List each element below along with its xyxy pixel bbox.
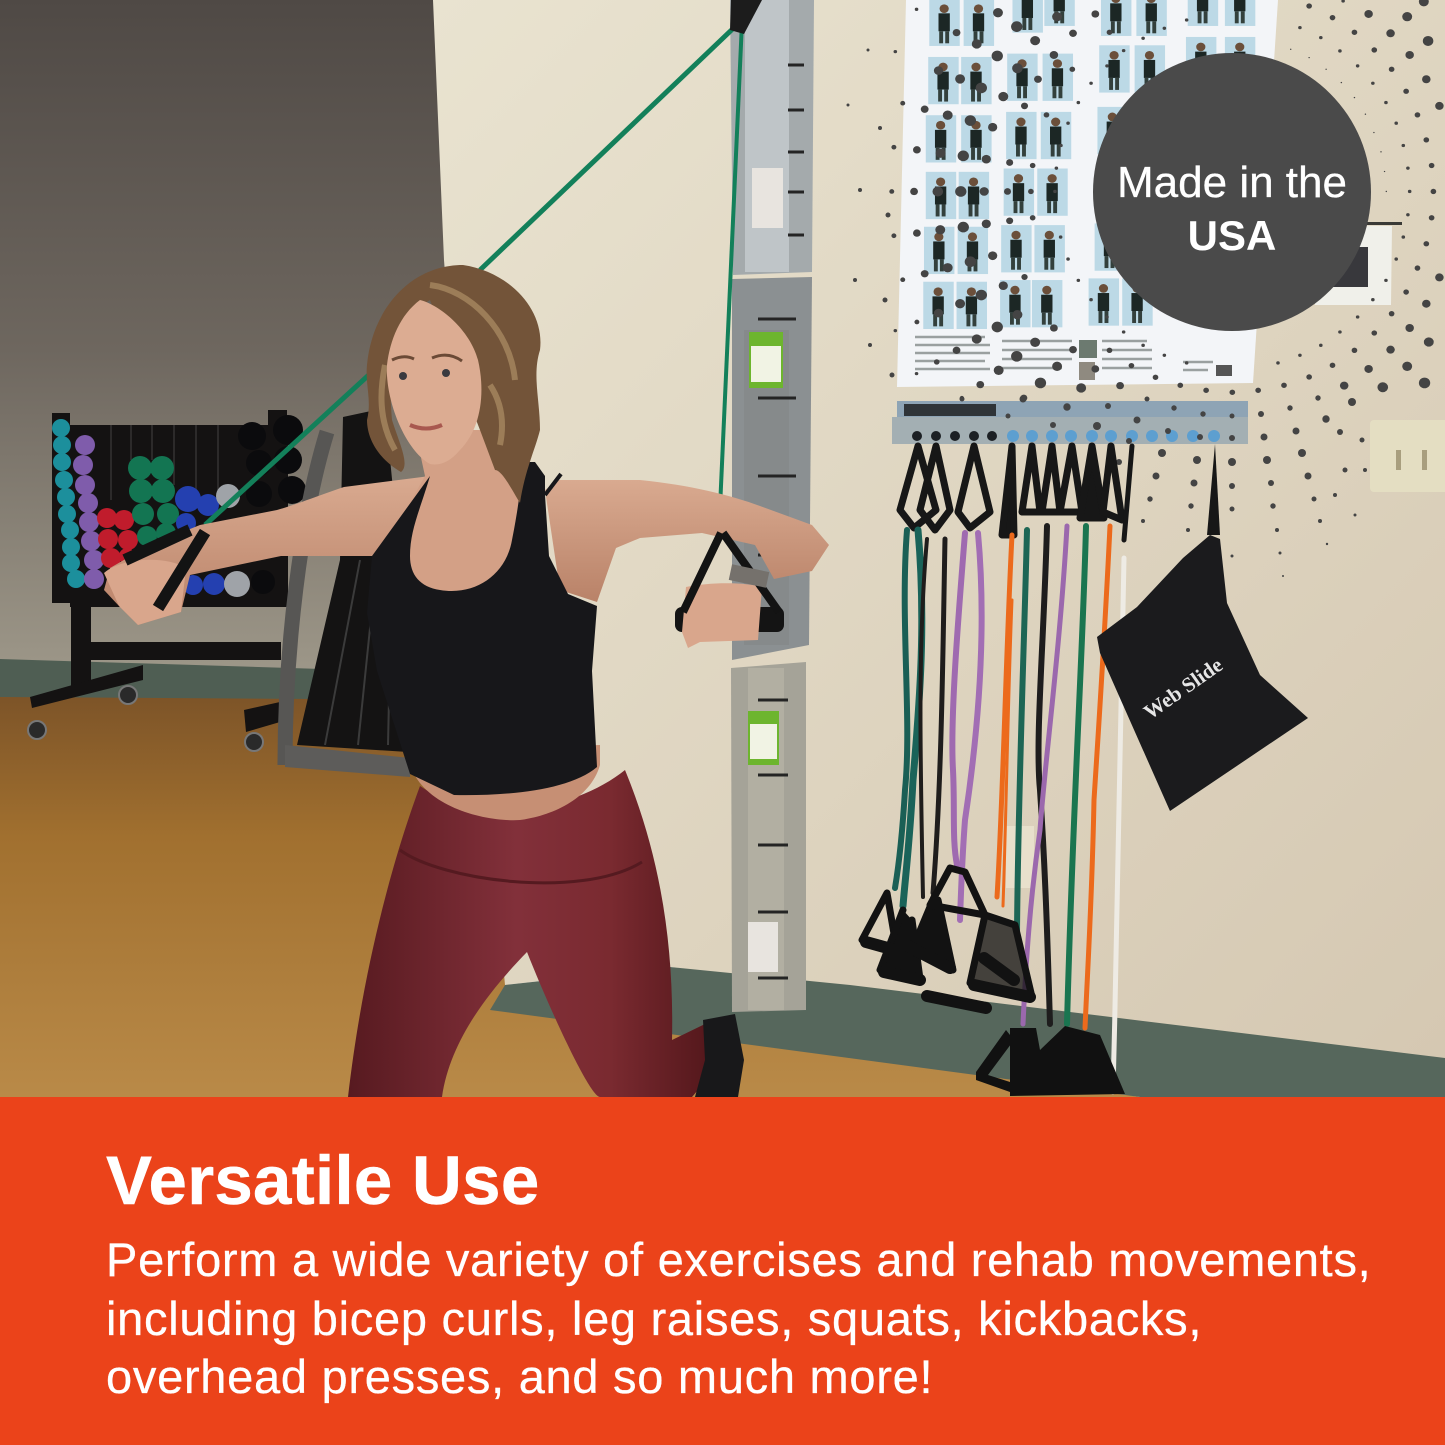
woman in lunge [104, 265, 829, 1097]
thin tank strap [545, 474, 561, 495]
left back wall [0, 0, 500, 700]
teal dumbbells [52, 419, 85, 588]
casters [28, 686, 263, 751]
drawstring bag with Web Slide logo: Web Slide [1139, 653, 1227, 724]
top band anchor [730, 0, 762, 34]
midriff [412, 745, 600, 820]
floor handle cluster [976, 1026, 1125, 1096]
photo: woman exercising with resistance bands [0, 0, 1445, 1097]
purple dumbbells [73, 435, 104, 589]
description text: overhead presses, and so much more! [106, 1350, 933, 1403]
metal wall track [730, 0, 814, 1012]
wood floor [0, 697, 1140, 1097]
baseboard right [490, 967, 1445, 1097]
green Web Slide labels [748, 332, 783, 765]
red dumbbells [97, 508, 138, 568]
badge: made in the USA: USA [1188, 212, 1276, 259]
right handle bar [675, 607, 784, 632]
mouth [410, 425, 442, 428]
left fist [104, 560, 186, 625]
blue dumbbells [175, 486, 225, 595]
folded black stand [285, 408, 410, 777]
drawstring bag with Web Slide logo [1097, 444, 1308, 811]
halftone dots on poster [889, 0, 1444, 401]
rack slats [111, 425, 218, 500]
upper track section [730, 0, 814, 275]
outlet plate [1006, 826, 1034, 888]
badge: made in the USA: Made in the [1117, 158, 1347, 207]
tank top [367, 462, 597, 795]
eyes [399, 369, 450, 380]
black top straps [900, 446, 1132, 540]
face [387, 300, 481, 464]
shoe [695, 1014, 744, 1097]
band hanger bar [892, 401, 1248, 444]
leggings [348, 770, 722, 1097]
hair [367, 265, 540, 503]
rack frame [30, 410, 288, 732]
hair highlights [381, 285, 515, 450]
middle track section [732, 277, 812, 660]
baseboard left [0, 659, 420, 715]
description text [106, 1233, 1371, 1404]
left handle straps [125, 530, 205, 608]
dumbbell rack [28, 410, 306, 751]
banner: versatile use [0, 1097, 1445, 1445]
heading: Versatile Use [106, 1142, 540, 1219]
description text: Perform a wide variety of exercises and rehab movements, [106, 1233, 1371, 1286]
lower track section [731, 662, 806, 1012]
chest and neck [400, 430, 545, 600]
eyebrows [392, 355, 462, 361]
right fist [682, 583, 762, 648]
waistband shading [400, 850, 642, 883]
caution labels [752, 168, 783, 228]
black handles [862, 868, 1032, 997]
right arm [545, 480, 829, 602]
hanging resistance bands [862, 446, 1132, 1096]
halftone dots on wall [846, 48, 1367, 577]
grey dumbbells [216, 484, 250, 597]
green dumbbells [128, 456, 179, 546]
description text: including bicep curls, leg raises, squats, kickbacks, [106, 1292, 1202, 1344]
wristwatch [729, 564, 769, 588]
green resistance bands in use [205, 0, 743, 530]
right handle straps [683, 533, 779, 612]
white wall control panel [1315, 222, 1402, 305]
exercise poster [897, 0, 1278, 387]
badge: made in the USA [1093, 53, 1371, 331]
main wall [433, 0, 1445, 1060]
left arm [104, 476, 430, 625]
light switch plate [1370, 420, 1445, 492]
black dumbbells [238, 415, 306, 594]
